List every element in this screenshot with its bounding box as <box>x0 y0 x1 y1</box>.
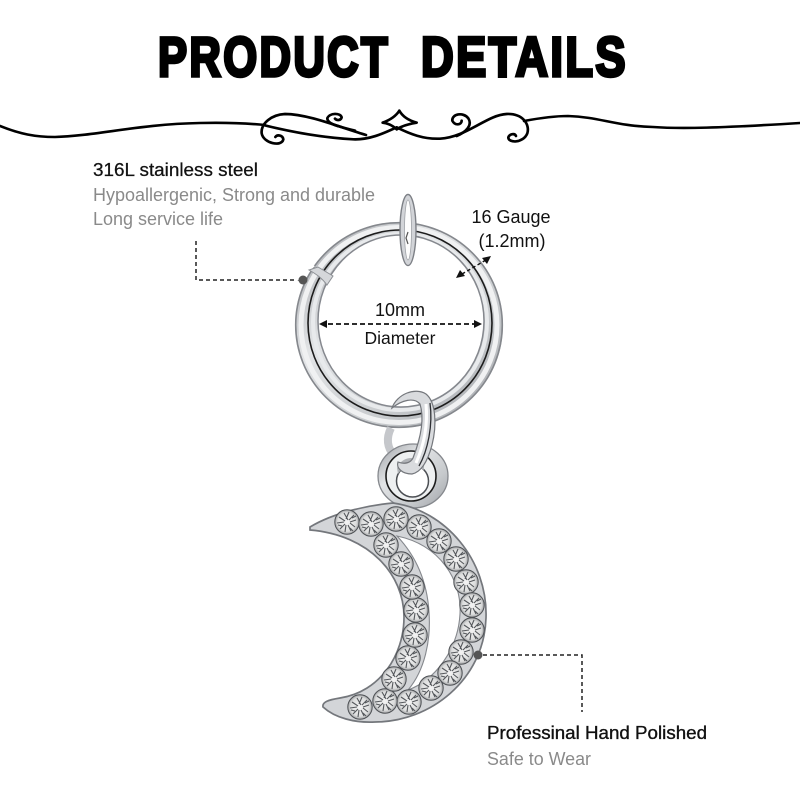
text block: material: Hypoallergenic, Strong and durable <box>93 185 375 205</box>
text block: material: Long service life <box>93 209 223 229</box>
ornamental divider <box>0 111 800 144</box>
text block: polish <box>487 723 707 769</box>
callout dot: material <box>298 276 308 284</box>
gauge label <box>471 207 551 251</box>
text block: polish: Professinal Hand Polished <box>487 723 707 743</box>
title: PRODUCT <box>158 25 390 88</box>
gauge label: (1.2mm) <box>478 231 546 251</box>
front of hanging loop <box>392 391 435 474</box>
gauge label: 16 Gauge <box>471 207 551 227</box>
gauge dimension arrow <box>456 256 491 278</box>
hanging loop and bail <box>378 391 448 508</box>
text block: material <box>93 160 375 229</box>
text block: polish: Safe to Wear <box>487 749 591 769</box>
rhinestones <box>335 507 484 719</box>
back of hanging loop <box>388 428 394 455</box>
title <box>158 25 628 88</box>
text block: material: 316L stainless steel <box>93 160 258 180</box>
title: DETAILS <box>421 25 628 88</box>
diameter label: 10mm <box>375 300 425 320</box>
callout line: polish <box>483 655 582 712</box>
diameter label <box>364 300 436 348</box>
pendant bail <box>378 444 448 508</box>
callout dot: polish <box>474 650 482 660</box>
diameter label: Diameter <box>364 328 436 348</box>
diameter dimension arrow <box>319 320 482 328</box>
clip-on hoop ring <box>295 222 503 428</box>
small clip loop at top <box>400 194 416 266</box>
crescent moon pendant <box>310 503 486 722</box>
callout line: material <box>196 241 300 280</box>
